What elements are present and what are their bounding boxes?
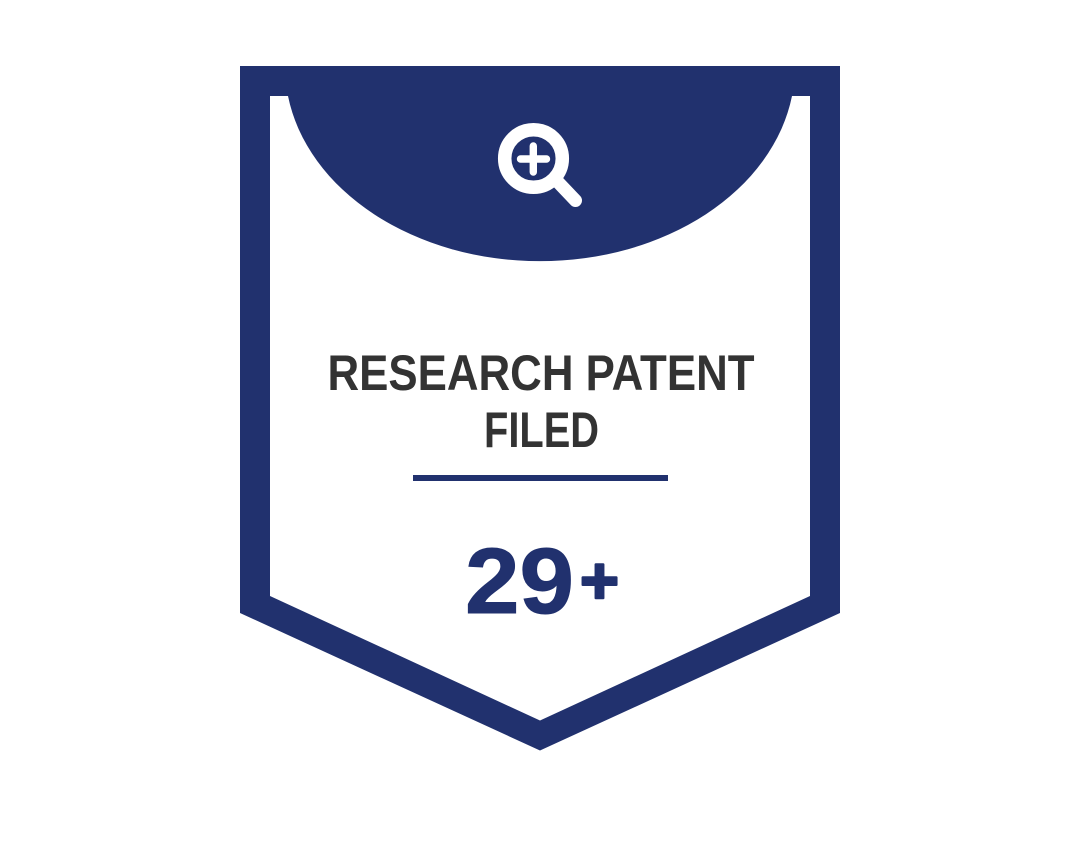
- heading: research patent filed: [328, 345, 754, 458]
- heading: research patent filed: FILED: [484, 402, 599, 458]
- shield outline: [240, 66, 840, 750]
- heading: research patent filed: RESEARCH PATENT: [328, 345, 754, 401]
- divider under heading: [413, 475, 668, 481]
- statistic: 29+: +: [580, 543, 619, 617]
- statistic: 29+: [465, 529, 619, 633]
- panel: shield badge: [240, 66, 840, 750]
- icon: magnifying glass with plus: [505, 130, 576, 200]
- statistic: 29+: 29: [465, 529, 574, 633]
- header semi-ellipse: [288, 96, 792, 261]
